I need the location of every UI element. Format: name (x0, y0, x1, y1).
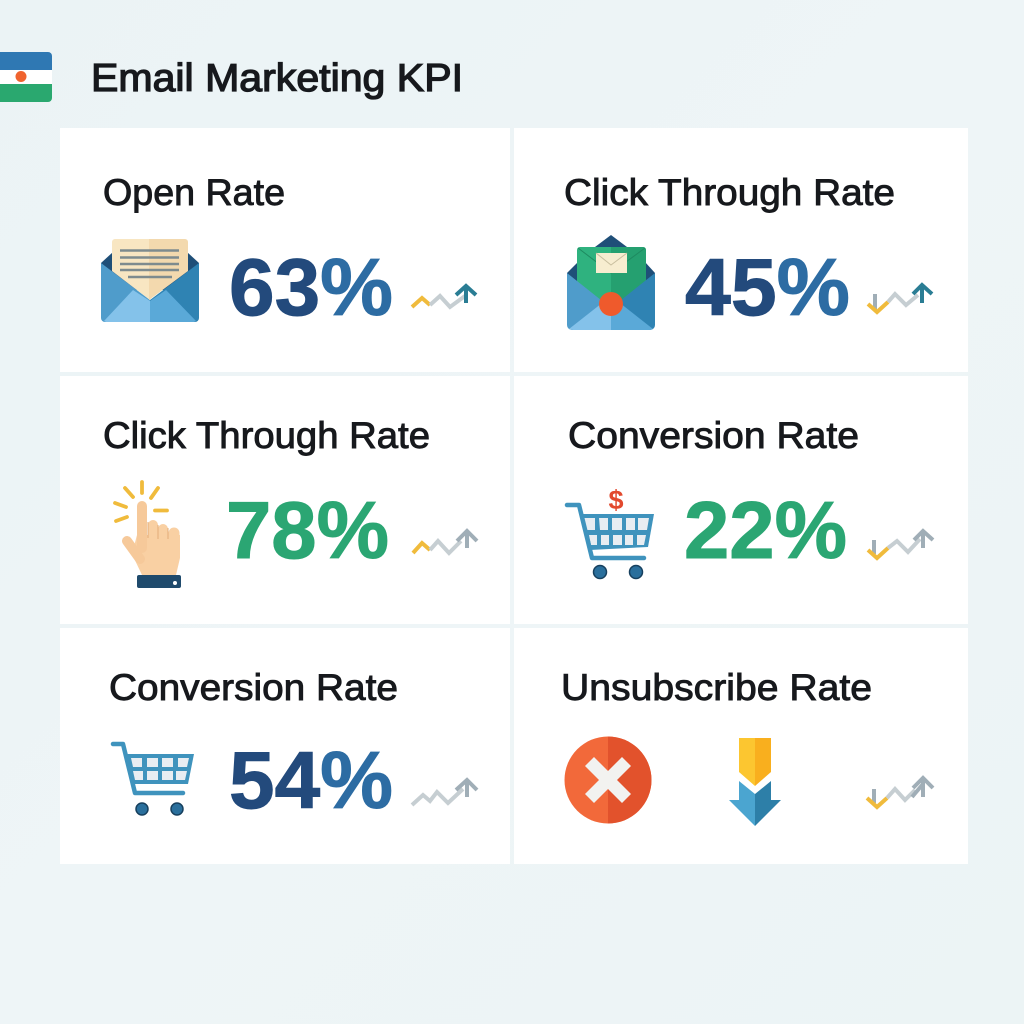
heading: open rate: Open Rate (103, 172, 285, 213)
icon: shopping cart with dollar (567, 485, 654, 578)
heading: conversion rate: Conversion Rate (109, 667, 398, 708)
value: 63%: 63% (229, 243, 393, 333)
icon: shopping cart (113, 744, 194, 815)
panel: conversion rate, bottom left (60, 628, 510, 864)
trend sparkline (867, 778, 933, 807)
panel: click through rate, middle left (60, 376, 510, 624)
trend sparkline (868, 531, 933, 558)
icon: shopping cart with dollar: $ (608, 485, 624, 515)
heading: click through rate: Click Through Rate (103, 415, 430, 456)
icon: envelope with green card (567, 235, 655, 330)
panel: click through rate, top right (514, 128, 968, 372)
icon: down arrow (729, 738, 781, 826)
value: 22%: 22% (684, 486, 847, 576)
value: 54%: 54% (229, 736, 393, 826)
flag logo (0, 52, 52, 102)
heading: conversion rate: Conversion Rate (568, 415, 859, 456)
icon: red cross circle (564, 736, 652, 824)
trend sparkline (413, 531, 477, 553)
value: 78%: 78% (226, 486, 389, 576)
icon: pointing hand (115, 482, 181, 588)
heading: unsubscribe rate: Unsubscribe Rate (561, 667, 872, 708)
trend sparkline (868, 285, 932, 312)
trend sparkline (412, 780, 477, 805)
icon: open envelope with letter (101, 239, 199, 322)
panel: unsubscribe rate (514, 628, 968, 864)
panel: open rate (60, 128, 510, 372)
panel: conversion rate, middle right (514, 376, 968, 624)
trend sparkline (412, 286, 476, 307)
heading: click through rate: Click Through Rate (564, 172, 895, 213)
value: 45%: 45% (685, 243, 850, 333)
title: Email Marketing KPI (91, 57, 463, 100)
